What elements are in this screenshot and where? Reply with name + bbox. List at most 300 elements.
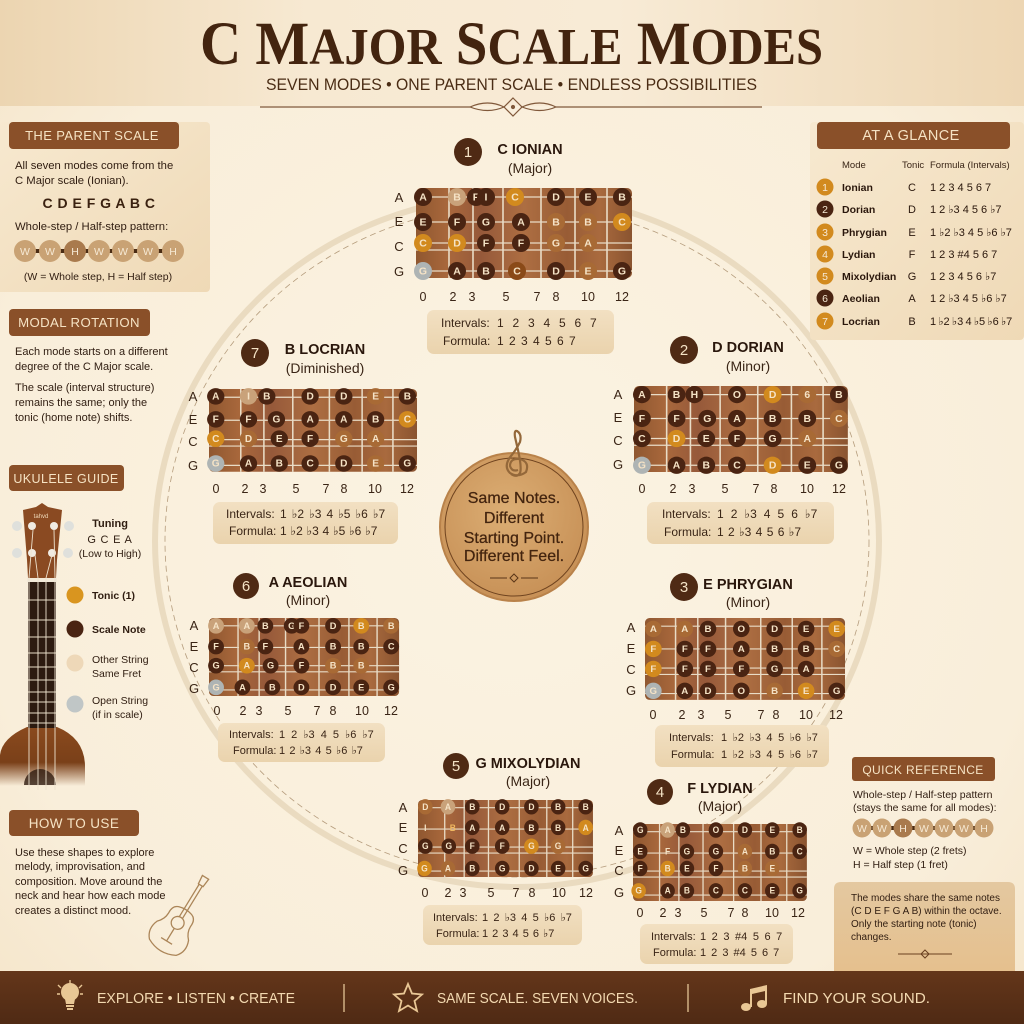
string labels: G (188, 458, 198, 473)
string labels: G (613, 457, 623, 472)
formula box: Intervals: (226, 507, 275, 521)
heading: quick reference (852, 757, 995, 781)
icon: ukulele (0, 503, 85, 790)
legend: open string: (if in scale) (92, 709, 143, 721)
formula box (647, 502, 834, 544)
fretboard: G (267, 661, 274, 671)
fretboard: A (340, 415, 347, 426)
fret numbers: 0 (420, 290, 427, 304)
fret numbers: 7 (534, 290, 541, 304)
fretboard: H (691, 390, 698, 401)
icon: treble clef (507, 431, 527, 476)
mode 1: C Ionian (394, 138, 632, 354)
formula box: 1 2 3 4 5 6 7 (497, 334, 576, 348)
fretboard: D (552, 192, 560, 204)
fretboard: A (239, 682, 246, 692)
heading: how to use (9, 810, 139, 836)
string labels: C (613, 433, 623, 448)
fretboard: G (650, 686, 657, 697)
formula box (655, 725, 829, 767)
quick reference pills (852, 818, 994, 838)
string labels: A (615, 823, 624, 838)
mode 7: B Locrian (188, 339, 417, 544)
fret numbers: 12 (829, 708, 843, 722)
fretboard: A (681, 624, 688, 635)
fret numbers: 5 (701, 906, 708, 920)
fretboard: C (404, 415, 411, 426)
quick reference pills: W (857, 823, 867, 835)
fret numbers: 3 (689, 482, 696, 496)
fretboard: E (637, 846, 643, 856)
how to use text: Use these shapes to explore (15, 847, 154, 859)
fretboard: E (684, 863, 690, 874)
fretboard: B (262, 621, 269, 631)
fretboard: G (638, 461, 646, 472)
mode subtitle: (Major) (508, 160, 552, 176)
fretboard: B (742, 863, 748, 874)
fret numbers: 2 (242, 482, 249, 496)
tuning label: G C E A (87, 534, 133, 546)
formula box: Intervals: (662, 507, 711, 521)
icon: ukulele: tahvd (34, 514, 48, 520)
row 4: Lydian (842, 249, 875, 261)
formula box: 1 2 ♭3 4 5 ♭6 ♭7 (279, 745, 363, 757)
note box: Only the starting note (tonic) (851, 919, 977, 930)
row 7 (816, 312, 1012, 330)
fretboard: G (482, 216, 490, 228)
fret numbers: 8 (341, 482, 348, 496)
header band (0, 0, 1024, 116)
quick reference key: W = Whole step (2 frets) (853, 845, 966, 857)
fret numbers: 0 (422, 886, 429, 900)
fretboard: D (673, 434, 680, 445)
how to use text: composition. Move around the (15, 876, 162, 888)
panel: quick reference (834, 757, 1015, 971)
fretboard: G (618, 266, 626, 278)
quick reference text: Whole-step / Half-step pattern (853, 789, 993, 801)
fret numbers (650, 708, 843, 722)
quick reference pills: W (877, 823, 887, 835)
row 3: 1 ♭2 ♭3 4 5 ♭6 ♭7 (930, 227, 1012, 239)
fretboard (633, 386, 848, 474)
heading: at a glance: AT A GLANCE (862, 128, 960, 144)
fret numbers: 12 (615, 290, 629, 304)
fretboard: E (372, 459, 379, 470)
fretboard (414, 188, 632, 280)
string labels: G (614, 885, 624, 900)
fretboard: D (499, 802, 505, 812)
row 4: 1 2 3 #4 5 6 7 (930, 249, 997, 261)
legend: other string same fret (66, 654, 149, 680)
note box (834, 882, 1015, 971)
row 3: 3 (822, 227, 828, 239)
formula box (218, 723, 385, 762)
fretboard: D (704, 686, 712, 697)
fretboard: B (388, 621, 395, 631)
fretboard: B (276, 459, 283, 470)
fretboard: G (769, 434, 777, 445)
fretboard: E (769, 863, 775, 874)
tuning label: Tuning (92, 518, 128, 530)
panel: at a glance (810, 122, 1024, 340)
fretboard: F (705, 644, 711, 655)
fretboard: I (424, 823, 426, 833)
row 3 (816, 224, 1012, 240)
fretboard: D (769, 390, 776, 401)
fretboard: G (272, 415, 281, 426)
fretboard: G (499, 863, 506, 874)
pattern legend: (W = Whole step, H = Half step) (24, 271, 172, 283)
medallion message: Same Notes. (468, 490, 560, 507)
formula box: Formula: (229, 524, 276, 538)
fretboard: C (733, 461, 741, 472)
fretboard: E (358, 682, 364, 692)
string labels: E (395, 214, 404, 229)
fretboard: F (682, 644, 688, 655)
formula box: Intervals: (651, 931, 696, 943)
fretboard: E (803, 624, 810, 635)
fretboard: A (665, 825, 671, 835)
formula box: Formula: (233, 745, 276, 757)
fretboard (207, 388, 417, 472)
fret numbers: 10 (581, 290, 595, 304)
fretboard: G (445, 841, 452, 851)
fretboard: G (713, 846, 719, 856)
fret numbers: 8 (553, 290, 560, 304)
note box: changes. (851, 932, 892, 943)
fretboard (645, 618, 845, 700)
fretboard: O (713, 825, 719, 835)
string labels (189, 618, 199, 696)
mode subtitle: (Diminished) (286, 360, 364, 376)
fretboard: A (681, 686, 688, 697)
parent scale description: C Major scale (Ionian). (15, 175, 129, 187)
fretboard: D (245, 434, 252, 445)
row 3: E (908, 227, 916, 239)
fretboard: B (469, 863, 475, 874)
fretboard: F (734, 434, 740, 445)
fret numbers: 3 (698, 708, 705, 722)
heading: ukulele guide: UKULELE GUIDE (13, 472, 119, 486)
row 6: A (908, 293, 916, 305)
fret numbers: 7 (513, 886, 520, 900)
mode subtitle: (Minor) (286, 592, 330, 608)
fretboard: E (833, 624, 841, 635)
fretboard: G (340, 434, 348, 445)
fretboard: G (771, 664, 778, 675)
fretboard: D (340, 459, 347, 470)
row 5: 1 2 3 4 5 6 ♭7 (930, 271, 996, 283)
number badge 1: 1 (464, 144, 472, 161)
fretboard: E (419, 216, 427, 228)
fretboard: C (511, 192, 519, 204)
fret numbers (639, 482, 846, 496)
fretboard: B (803, 414, 811, 425)
fret numbers: 0 (639, 482, 646, 496)
fretboard: B (358, 661, 365, 671)
fretboard: C (419, 238, 427, 250)
formula box: 1 ♭2 ♭3 4 ♭5 ♭6 ♭7 (280, 524, 378, 538)
formula box: Formula: (671, 749, 714, 761)
scale notes: C D E F G A B C (42, 195, 156, 211)
mode subtitle: (Minor) (726, 594, 770, 610)
fretboard: B (555, 823, 561, 833)
formula box: Formula: (653, 947, 696, 959)
fret numbers: 12 (400, 482, 414, 496)
fretboard: E (584, 266, 592, 278)
fretboard: A (306, 415, 314, 426)
footer text: find your sound: FIND YOUR SOUND. (783, 990, 930, 1007)
fretboard: A (298, 642, 305, 652)
formula box: 1 2 3 4 5 6 ♭7 (482, 928, 554, 940)
fret numbers: 7 (758, 708, 765, 722)
fretboard: B (552, 216, 560, 228)
fretboard: G (796, 886, 803, 896)
row 6 (816, 290, 1007, 306)
fretboard: B (358, 642, 365, 652)
rotation circle (155, 195, 879, 887)
mode subtitle: (Major) (506, 773, 550, 789)
icon: star (394, 984, 422, 1011)
fret numbers: 2 (240, 704, 247, 718)
formula box (427, 310, 614, 354)
fret numbers: 3 (675, 906, 682, 920)
heading: modal rotation: MODAL ROTATION (18, 315, 140, 330)
icon: light bulb (57, 980, 83, 1010)
fretboard: G (684, 846, 690, 856)
fretboard: D (422, 802, 428, 812)
step pattern pills: H (169, 246, 177, 258)
note box: (C D E F G A B) within the octave. (851, 906, 1002, 917)
legend: tonic (66, 586, 135, 604)
formula box: Formula: (443, 334, 490, 348)
fretboard: B (680, 825, 686, 835)
fret numbers: 10 (765, 906, 779, 920)
fretboard: D (340, 392, 347, 403)
quick reference pills: H (899, 823, 907, 835)
fretboard: B (330, 661, 337, 671)
formula box: 1 2 3 #4 5 6 7 (700, 931, 782, 943)
fretboard: C (742, 886, 749, 896)
string labels (394, 190, 404, 279)
fret numbers: 0 (650, 708, 657, 722)
fretboard: O (738, 624, 746, 635)
fret numbers: 5 (293, 482, 300, 496)
string labels (626, 620, 636, 698)
row 6: 1 2 ♭3 4 5 ♭6 ♭7 (930, 293, 1007, 305)
row 7: 1 ♭2 ♭3 4 ♭5 ♭6 ♭7 (930, 316, 1012, 328)
fret numbers: 7 (753, 482, 760, 496)
step pattern pills: W (143, 246, 153, 258)
row 1 (816, 178, 991, 196)
title: C MAJOR SCALE MODES (200, 11, 823, 78)
legend: scale note (66, 620, 146, 638)
fretboard: B (803, 644, 810, 655)
fretboard: B (771, 644, 778, 655)
fretboard: G (528, 841, 535, 851)
fret numbers: 10 (368, 482, 382, 496)
fretboard: F (518, 238, 525, 250)
fretboard: F (673, 414, 680, 425)
fret numbers: 3 (260, 482, 267, 496)
fretboard: G (552, 238, 560, 250)
fretboard: E (769, 886, 775, 896)
fretboard: C (306, 459, 314, 470)
string labels (614, 823, 624, 900)
fretboard: 6 (804, 390, 810, 401)
fretboard: D (528, 802, 534, 812)
string labels: E (399, 820, 408, 835)
row 2: 1 2 ♭3 4 5 6 ♭7 (930, 204, 1002, 216)
fretboard: B (584, 216, 592, 228)
fret numbers (213, 482, 414, 496)
fret numbers: 7 (314, 704, 321, 718)
quick reference pills: W (919, 823, 929, 835)
fretboard: F (473, 192, 480, 204)
row 3: Phrygian (842, 227, 887, 239)
glance table header (842, 160, 1010, 171)
step pattern pills: W (45, 246, 55, 258)
legend: other string same fret: Same Fret (92, 668, 141, 680)
formula box: 1 ♭2 ♭3 4 5 ♭6 ♭7 (721, 732, 818, 744)
fretboard: F (213, 415, 219, 426)
fret numbers: 2 (450, 290, 457, 304)
fret numbers (422, 886, 593, 900)
fretboard: D (330, 621, 337, 631)
fretboard: E (276, 434, 283, 445)
fretboard: F (650, 664, 656, 675)
fretboard: G (212, 459, 220, 470)
row 1: 1 2 3 4 5 6 7 (930, 182, 991, 194)
fret numbers: 8 (771, 482, 778, 496)
fretboard: F (500, 841, 505, 851)
fretboard: C (833, 644, 840, 655)
row 4 (816, 246, 997, 262)
string labels: C (188, 434, 198, 449)
fretboard: A (584, 238, 592, 250)
fret numbers: 8 (742, 906, 749, 920)
fretboard: B (404, 392, 411, 403)
fret numbers: 12 (579, 886, 593, 900)
string labels: G (398, 863, 408, 878)
fretboard: I (485, 192, 488, 204)
fretboard: D (453, 238, 461, 250)
fret numbers: 3 (256, 704, 263, 718)
fretboard: B (528, 823, 534, 833)
row 4: F (909, 249, 916, 261)
heading: quick reference: QUICK REFERENCE (862, 763, 984, 777)
row 1: C (908, 182, 916, 194)
fretboard: F (639, 414, 645, 425)
fretboard: E (769, 825, 775, 835)
formula box: 1 2 ♭3 4 5 ♭6 ♭7 (482, 912, 572, 924)
fret numbers: 0 (637, 906, 644, 920)
string labels: A (614, 387, 623, 402)
row 6: Aeolian (842, 293, 880, 305)
string labels: E (190, 639, 199, 654)
quick reference key: H = Half step (1 fret) (853, 859, 948, 871)
string labels (398, 800, 408, 878)
number badge 4 (647, 779, 673, 805)
legend: scale note: Scale Note (92, 624, 146, 636)
string labels: C (614, 863, 624, 878)
string labels (613, 387, 623, 472)
row 7: 7 (822, 316, 828, 328)
string labels: A (190, 618, 199, 633)
fret numbers: 2 (679, 708, 686, 722)
fretboard: A (453, 266, 461, 278)
pattern label: Whole-step / Half-step pattern: (15, 221, 168, 233)
mode 5: G Mixolydian (398, 753, 593, 945)
fretboard: D (769, 461, 776, 472)
fretboard: A (803, 664, 810, 675)
mode title: D DORIAN (712, 340, 784, 356)
fretboard: B (684, 886, 690, 896)
fretboard: F (738, 664, 744, 675)
fretboard: A (213, 621, 220, 631)
fretboard (417, 799, 593, 877)
row 5: Mixolydian (842, 271, 896, 283)
fret numbers: 12 (791, 906, 805, 920)
fretboard: G (835, 461, 843, 472)
fretboard: D (330, 682, 337, 692)
fretboard: G (288, 621, 295, 631)
fret numbers: 10 (799, 708, 813, 722)
heading: the parent scale: THE PARENT SCALE (25, 128, 159, 143)
heading: the parent scale (9, 122, 179, 149)
fretboard: C (835, 414, 843, 425)
legend: open string (66, 695, 148, 721)
note box: The modes share the same notes (851, 893, 1000, 904)
glance table header: Mode (842, 160, 866, 171)
fretboard: F (263, 642, 269, 652)
fretboard: G (635, 886, 642, 896)
title ornament (260, 98, 762, 116)
mode title: A AEOLIAN (269, 575, 347, 591)
number badge 7 (241, 339, 269, 367)
fretboard: A (244, 621, 251, 631)
modal rotation text: The scale (interval structure) (15, 382, 154, 394)
fretboard: B (835, 390, 843, 401)
fretboard: G (212, 661, 220, 671)
fretboard: O (733, 390, 741, 401)
row 5: G (908, 271, 916, 283)
formula box: 1 ♭2 ♭3 4 ♭5 ♭6 ♭7 (280, 507, 386, 521)
how to use text: melody, improvisation, and (15, 861, 145, 873)
fretboard: E (555, 863, 561, 874)
string labels: E (615, 843, 624, 858)
mode title: F LYDIAN (687, 781, 753, 797)
fretboard (631, 822, 807, 901)
modal rotation text: degree of the C Major scale. (15, 361, 153, 373)
fretboard: B (673, 390, 680, 401)
fret numbers: 8 (330, 704, 337, 718)
fretboard: F (213, 642, 219, 652)
fret numbers: 7 (323, 482, 330, 496)
fretboard: C (388, 642, 395, 652)
medallion message: Starting Point. (464, 530, 564, 547)
tuning label: (Low to High) (79, 548, 141, 560)
formula box: 1 2 ♭3 4 5 ♭6 ♭7 (279, 729, 374, 741)
fretboard: I (247, 392, 250, 403)
fretboard: D (771, 624, 778, 635)
footer band (0, 971, 1024, 1024)
fret numbers (420, 290, 629, 304)
fretboard: B (771, 686, 778, 697)
formula box (213, 502, 398, 544)
row 6: 6 (822, 293, 828, 305)
step pattern pills: W (118, 246, 128, 258)
